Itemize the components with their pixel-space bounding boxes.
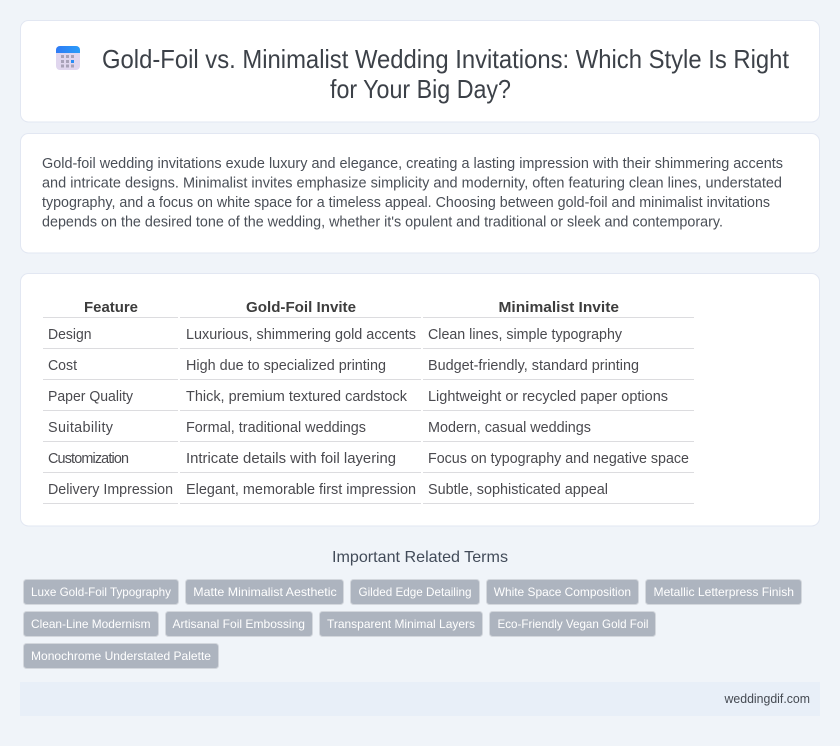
table header (84, 299, 619, 316)
row: customization (48, 451, 689, 467)
panel: header (20, 20, 820, 122)
title: for Your Big Day? (330, 76, 511, 104)
row: paper quality: Lightweight or recycled paper options (428, 389, 668, 405)
row: suitability: Modern, casual weddings (428, 420, 591, 436)
tag: Monochrome Understated Palette (31, 649, 211, 663)
row: design: Design (48, 327, 92, 343)
table header: Feature (84, 299, 138, 316)
tag (24, 644, 218, 668)
row: cost: High due to specialized printing (186, 358, 386, 374)
row: cost (48, 358, 639, 374)
tag (320, 612, 482, 636)
footer (20, 682, 820, 716)
table header: Minimalist Invite (498, 299, 619, 316)
row: customization: Customization (48, 451, 129, 467)
row: design: Clean lines, simple typography (428, 327, 623, 343)
row: delivery impression (48, 482, 608, 498)
row: cost: Cost (48, 358, 77, 374)
table header: Gold-Foil Invite (246, 299, 356, 316)
row: design (48, 327, 623, 343)
tag (646, 580, 802, 604)
title: Gold-Foil vs. Minimalist Wedding Invitations: Which Style Is Right (102, 46, 789, 74)
tag: Artisanal Foil Embossing (172, 617, 305, 631)
row: customization: Focus on typography and negative space (428, 451, 689, 467)
text block: introduction: and intricate designs. Minimalist invites emphasize simplicity and modernity, often featuring clean lines, understated (42, 176, 782, 192)
tag (24, 580, 178, 604)
tag list (24, 580, 802, 668)
tag: Luxe Gold-Foil Typography (31, 585, 171, 599)
text block: introduction: Gold-foil wedding invitations exude luxury and elegance, creating a lasting impression with their shimmering accents (42, 156, 783, 172)
footer: weddingdif.com (724, 691, 810, 706)
row: paper quality: Thick, premium textured cardstock (186, 389, 408, 405)
tag: Gilded Edge Detailing (358, 585, 472, 599)
row: delivery impression: Delivery Impression (48, 482, 173, 498)
row: paper quality: Paper Quality (48, 389, 134, 405)
tag: Metallic Letterpress Finish (654, 585, 794, 599)
tag (350, 580, 480, 604)
tag (166, 612, 312, 636)
text block: introduction: depends on the desired tone of the wedding, whether it's opulent and traditional or sleek and contemporary. (42, 214, 723, 230)
title (102, 46, 789, 104)
tag: Matte Minimalist Aesthetic (193, 585, 337, 599)
row: suitability: Formal, traditional weddings (186, 420, 366, 436)
tag: White Space Composition (494, 585, 631, 599)
row: suitability (48, 420, 591, 436)
tag (486, 580, 638, 604)
tag (490, 612, 656, 636)
tag (24, 612, 158, 636)
row: paper quality (48, 389, 668, 405)
row: delivery impression: Subtle, sophisticated appeal (428, 482, 608, 498)
tag: Eco-Friendly Vegan Gold Foil (498, 617, 648, 631)
text block: introduction: typography, and a focus on white space for a timeless appeal. Choosing between gold-foil and minimalist invitations (42, 195, 770, 211)
row: suitability: Suitability (48, 420, 114, 436)
panel: introduction (20, 134, 820, 253)
row: cost: Budget-friendly, standard printing (428, 358, 639, 374)
row: delivery impression: Elegant, memorable first impression (186, 482, 416, 498)
tag: Clean-Line Modernism (31, 617, 150, 631)
row: customization: Intricate details with foil layering (186, 451, 396, 467)
text block: introduction (42, 156, 783, 230)
icon: calendar (56, 46, 80, 70)
heading: important related terms: Important Related Terms (332, 549, 508, 566)
tag (186, 580, 344, 604)
tag: Transparent Minimal Layers (327, 617, 475, 631)
panel: comparison table (20, 274, 820, 526)
row: design: Luxurious, shimmering gold accents (186, 327, 416, 343)
